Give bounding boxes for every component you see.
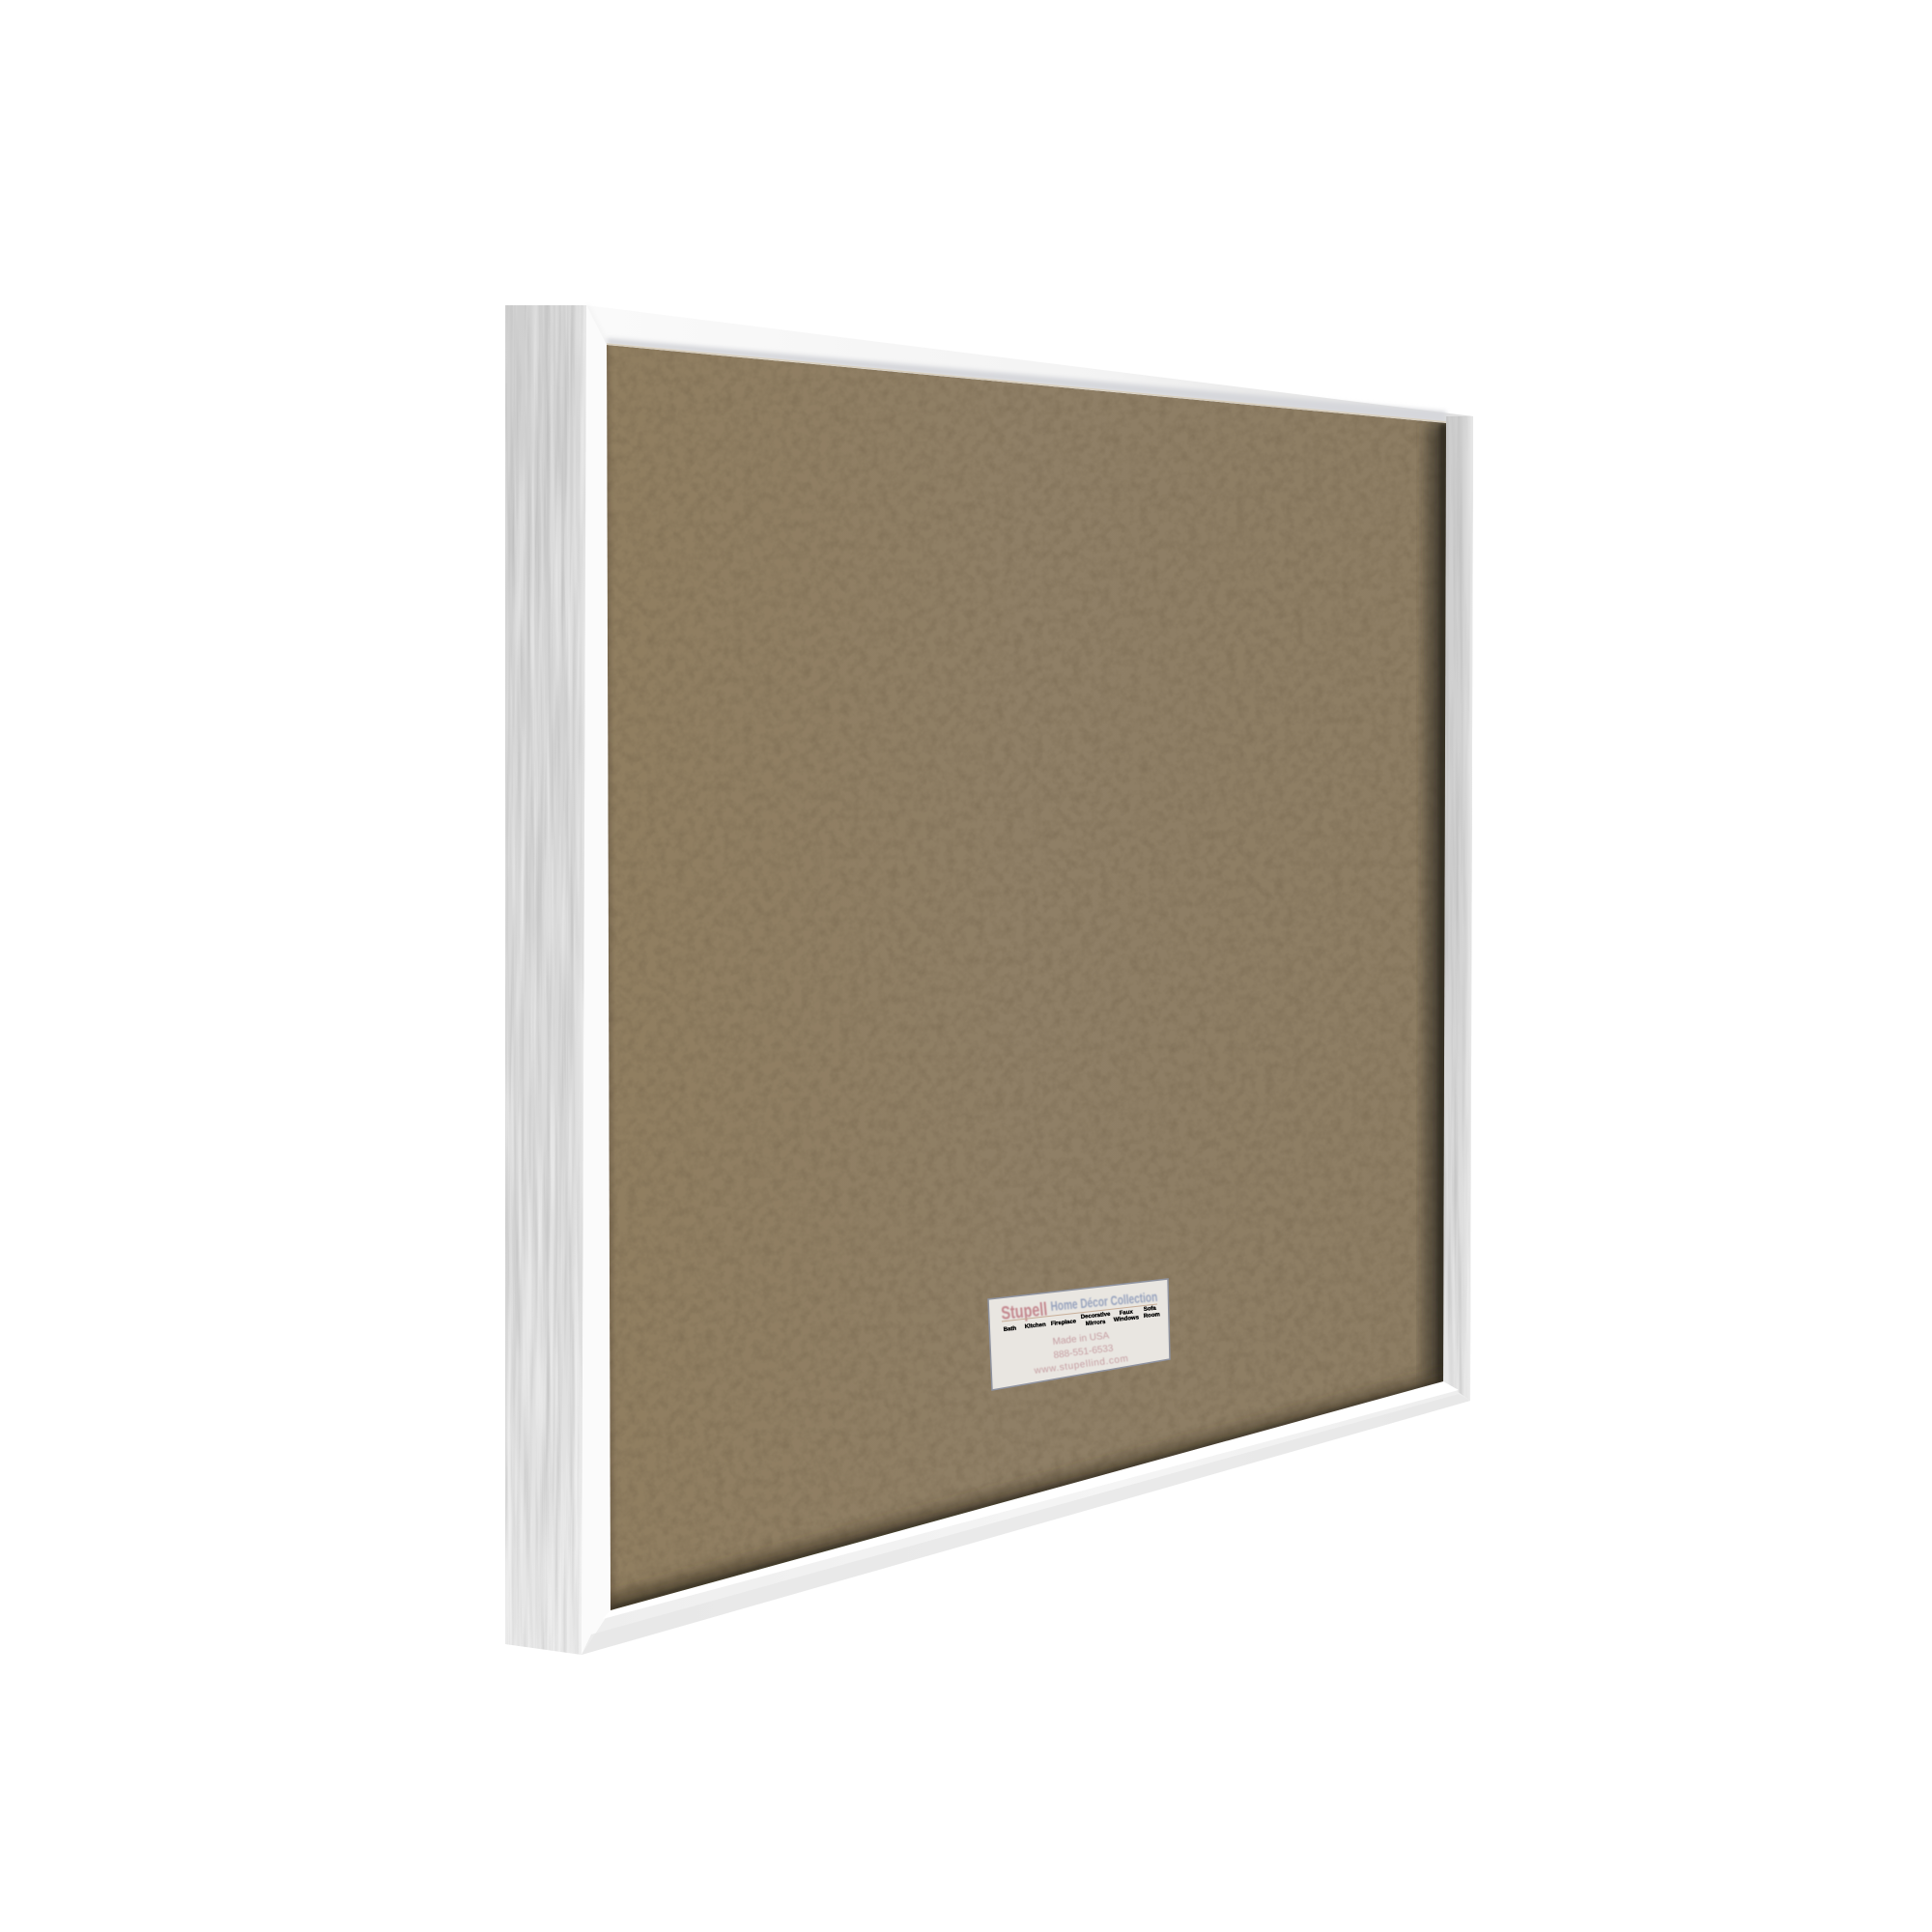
label text: product categories: Faux [1120, 1309, 1134, 1317]
label text: product categories: Sofa [1144, 1306, 1157, 1313]
label divider [1002, 1304, 1157, 1321]
label text: product categories: Room [1144, 1312, 1160, 1320]
label text: product categories: Windows [1114, 1315, 1140, 1323]
frame front: left rail [582, 305, 611, 1655]
label text: product categories [1004, 1306, 1160, 1333]
board inner shadows [599, 338, 1449, 1618]
brown backing board [599, 338, 1454, 1618]
frame front: bottom rail [582, 1381, 1470, 1655]
label text: collection name: Home Décor Collection [1050, 1290, 1158, 1314]
product label sticker [988, 1279, 1170, 1390]
label text: contact details [1033, 1330, 1129, 1377]
label text: product categories: Fireplace [1051, 1319, 1077, 1327]
top rail inner edge highlight [607, 344, 1446, 422]
scene: framed panel back view [505, 305, 1473, 1655]
frame side rail [505, 305, 586, 1658]
label text: contact details: Made in USA [1052, 1330, 1110, 1348]
frame front: top rail [586, 305, 1473, 423]
label text: product categories: Mirrors [1086, 1320, 1106, 1327]
label text: contact details: 888-551-6533 [1053, 1343, 1115, 1361]
label text: contact details: www.stupellind.com [1033, 1353, 1129, 1377]
label text: product categories: Kitchen [1025, 1322, 1046, 1330]
label text: product categories: Decorative [1081, 1312, 1111, 1321]
label text: brand: Stupell [1000, 1299, 1048, 1324]
label text: product categories: Bath [1004, 1326, 1017, 1333]
frame front: right rail [1443, 416, 1473, 1401]
